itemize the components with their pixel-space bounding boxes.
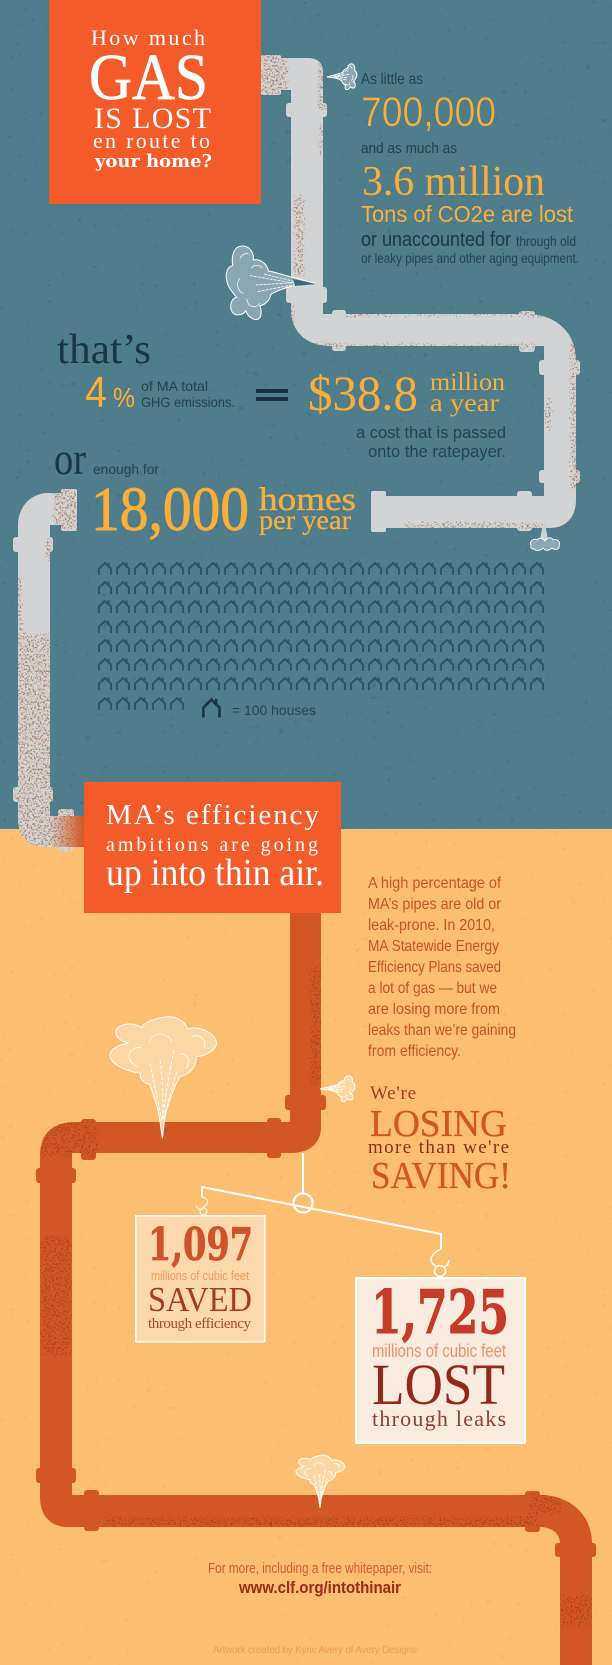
- heading line: your home?: your home?: [94, 151, 212, 172]
- icon: large peach gas cloud: [110, 1017, 217, 1138]
- icon: small peach cloud by pipe: [320, 1076, 355, 1102]
- LOSING: LOSING: [370, 1103, 507, 1145]
- url: www.clf.org/intothinair: [238, 1578, 401, 1597]
- footer: more information: [208, 1560, 432, 1597]
- or: or: [54, 433, 86, 484]
- icon: gas jet tip: [293, 279, 316, 286]
- teal background: [0, 0, 612, 829]
- peach background: [0, 829, 612, 1665]
- a year: a year: [430, 390, 500, 417]
- and as much as: and as much as: [361, 140, 457, 157]
- text block: explanation paragraph: [368, 875, 516, 1060]
- icon: bottom peach gas cloud: [296, 1455, 345, 1508]
- homes: homes: [259, 482, 356, 518]
- text block: that's 4 percent: [57, 327, 235, 417]
- enough for: enough for: [93, 461, 159, 477]
- number: 1,097: 1,097: [148, 1218, 253, 1271]
- icon: large teal gas cloud: [226, 246, 315, 319]
- millions of cubic feet: millions of cubic feet: [372, 1341, 506, 1361]
- LOST: LOST: [372, 1352, 505, 1417]
- that's: that’s: [57, 327, 151, 373]
- pipe colour change: [50, 816, 84, 847]
- Tons of CO2e are lost: Tons of CO2e are lost: [361, 201, 574, 227]
- GHG emissions: GHG emissions.: [141, 394, 235, 410]
- legend: 100 houses: [203, 699, 316, 718]
- number: $38.8: $38.8: [308, 365, 418, 421]
- text block: explanation paragraph: A high percentage of: [368, 875, 502, 892]
- text block: explanation paragraph: are losing more from: [368, 1001, 500, 1018]
- ambitions are going: ambitions are going: [106, 834, 318, 856]
- SAVING: SAVING!: [371, 1155, 511, 1197]
- number: 18,000: 18,000: [91, 476, 249, 544]
- more than we're: more than we're: [368, 1137, 509, 1158]
- equals sign: [256, 389, 288, 401]
- credit: Artwork created by Kyric Avery of Avery Designs: [213, 1645, 417, 1656]
- orange pipe: [36, 913, 596, 1665]
- rust on orange pipe: [36, 960, 596, 1630]
- million: million: [430, 369, 506, 396]
- We're: We're: [370, 1083, 416, 1104]
- As little as: As little as: [361, 71, 423, 88]
- legend text: = 100 houses: [232, 702, 316, 718]
- text block: losing more than saving: [368, 1083, 511, 1197]
- percent sign: %: [113, 382, 135, 413]
- whitepaper line: For more, including a free whitepaper, visit:: [208, 1560, 432, 1577]
- heading line: How much: How much: [91, 25, 205, 50]
- through efficiency: through efficiency: [148, 1316, 252, 1332]
- panel: title: [49, 0, 261, 204]
- text block: amount of gas lost: [361, 71, 579, 266]
- MA's efficiency: MA’s efficiency: [106, 799, 320, 831]
- heading line: en route to: en route to: [93, 128, 210, 153]
- number: 3.6 million: 3.6 million: [362, 159, 545, 205]
- grey upper pipe: [261, 55, 580, 532]
- per year: per year: [259, 505, 351, 535]
- number: 4: 4: [85, 368, 107, 417]
- through leaks: through leaks: [372, 1406, 506, 1431]
- text block: explanation paragraph: MA Statewide Energy: [368, 938, 499, 955]
- grey lower pipe: [13, 489, 84, 851]
- text block: 18,000 homes: [54, 433, 356, 544]
- heading line: IS LOST: IS LOST: [94, 102, 211, 135]
- icon: dripping gas cloud: [531, 517, 560, 550]
- number: 700,000: 700,000: [361, 88, 496, 135]
- icon: house: [203, 699, 220, 718]
- text block: explanation paragraph: from efficiency.: [368, 1043, 461, 1060]
- up into thin air: up into thin air.: [106, 852, 324, 894]
- number: 1,725: 1,725: [371, 1278, 509, 1348]
- a cost that is passed: a cost that is passed: [356, 423, 506, 442]
- text block: explanation paragraph: Efficiency Plans saved: [368, 959, 501, 976]
- icon: small teal gas cloud: [327, 64, 357, 90]
- panel: 1,725 lost: [356, 1278, 525, 1443]
- text block: explanation paragraph: leak-prone. In 2010,: [368, 917, 495, 934]
- panel: efficiency heading: [84, 782, 341, 913]
- text block: explanation paragraph: a lot of gas — but we: [368, 980, 497, 997]
- heading line: GAS: GAS: [89, 41, 208, 114]
- or unaccounted for: or unaccounted for: [361, 229, 511, 251]
- balance scale: [196, 1153, 449, 1276]
- SAVED: SAVED: [148, 1280, 252, 1319]
- rust on grey pipes: [10, 50, 584, 853]
- of MA total: of MA total: [141, 378, 208, 394]
- text block: explanation paragraph: leaks than we’re gaining: [368, 1022, 516, 1039]
- text block: cost: [308, 365, 506, 461]
- onto the ratepayer: onto the ratepayer.: [368, 442, 506, 461]
- through old: through old: [516, 233, 576, 249]
- millions of cubic feet: millions of cubic feet: [151, 1268, 249, 1283]
- pictogram: houses: [99, 562, 543, 710]
- text block: explanation paragraph: MA’s pipes are old or: [368, 896, 502, 913]
- panel: 1,097 saved: [136, 1216, 265, 1342]
